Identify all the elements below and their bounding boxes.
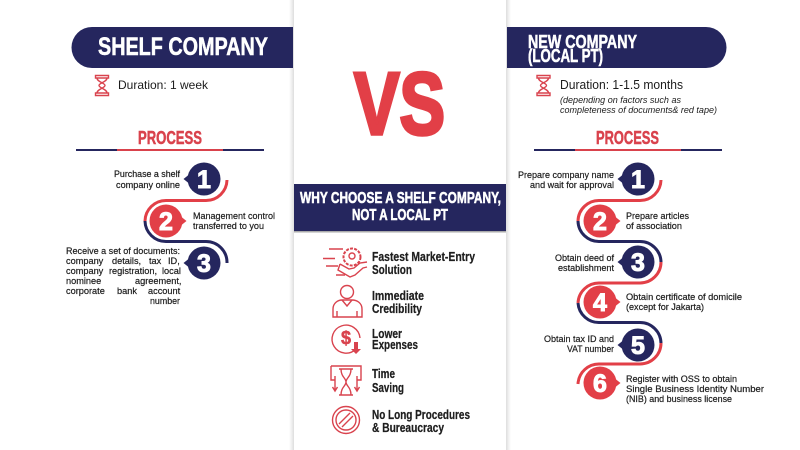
step 1: 1 (197, 166, 211, 194)
step 1 (518, 162, 654, 196)
step 3: establishment (558, 263, 614, 273)
duration: shelf company: Duration: 1 week (118, 78, 209, 92)
step 6: (NIB) and business license (626, 394, 732, 404)
process flow: shelf company (66, 162, 275, 306)
heading banner: new company: NEW COMPANY (528, 32, 637, 52)
duration: new company: Duration: 1-1.5 months (560, 78, 683, 92)
step 4: (except for Jakarta) (626, 302, 704, 312)
step 2: Prepare articles (626, 211, 689, 221)
benefit: lower expenses: Lower (372, 327, 402, 341)
step 3: 3 (197, 250, 211, 278)
heading banner: shelf company: SHELF COMPANY (98, 33, 268, 61)
step 1 (114, 162, 220, 196)
benefit: immediate credibility: Immediate (372, 289, 424, 303)
step 3: ID, (168, 256, 180, 266)
step 5: VAT number (567, 344, 614, 354)
panel: centre column (289, 0, 511, 450)
step 4 (584, 286, 742, 318)
step 1: and wait for approval (530, 180, 614, 190)
benefit: no long procedures (332, 406, 470, 435)
icon: dollar with down arrow: $ (341, 328, 351, 348)
why choose banner: NOT A LOCAL PT (352, 207, 448, 224)
heading banner: shelf company (72, 27, 293, 68)
benefit: time saving: Saving (372, 381, 404, 395)
step 2: transferred to you (193, 221, 264, 231)
benefit: fastest market-entry: Fastest Market-Entry (372, 250, 475, 264)
heading banner: new company (507, 27, 726, 68)
step 6: Single Business Identity Number (626, 384, 764, 394)
duration: new company: (depending on factors such as (560, 95, 682, 105)
step 5: Obtain tax ID and (544, 334, 614, 344)
step 3: nominee (66, 276, 101, 286)
step 3: number (150, 296, 180, 306)
duration: new company: completeness of documents& red tape) (560, 105, 717, 115)
step 3: bank (117, 286, 137, 296)
step 3 (555, 246, 654, 278)
step 2: of association (626, 221, 682, 231)
step 3: registration, (109, 266, 157, 276)
benefit: immediate credibility (333, 286, 424, 317)
step 3: local (162, 266, 181, 276)
step 1: Purchase a shelf (114, 169, 180, 179)
icon: person with badge (333, 286, 362, 317)
step 3: details, (112, 256, 141, 266)
step 1: company online (116, 180, 180, 190)
benefit: fastest market-entry: Solution (372, 263, 412, 277)
step 3: agreement, (135, 276, 181, 286)
step 3: 3 (631, 249, 645, 277)
step 1: Prepare company name (518, 170, 614, 180)
step 4: 4 (593, 289, 607, 317)
step 2: 2 (593, 208, 607, 236)
why choose banner (294, 184, 506, 232)
step 1: 1 (631, 166, 645, 194)
benefit: lower expenses: Expenses (372, 338, 418, 352)
duration: shelf company (96, 76, 209, 96)
process flow: new company (518, 162, 764, 404)
icon: prohibition sign (332, 406, 360, 434)
step 6: 6 (593, 370, 607, 398)
step 6: Register with OSS to obtain (626, 374, 737, 384)
step 3: company (66, 266, 104, 276)
heading banner: new company: (LOCAL PT) (528, 46, 603, 66)
step 3: tax (149, 256, 162, 266)
benefit: immediate credibility: Credibility (372, 302, 422, 316)
step 3: Receive a set of documents: (66, 246, 180, 256)
icon: gear and handshake (323, 248, 367, 277)
icon: hourglass right (537, 76, 550, 96)
duration: new company (537, 76, 717, 115)
step 2 (584, 204, 689, 238)
icon: hourglass left (96, 76, 108, 96)
step 3 (66, 246, 220, 306)
step 3: corporate (66, 286, 105, 296)
benefit: time saving (331, 366, 404, 395)
benefit: lower expenses (332, 325, 418, 354)
step 4: Obtain certificate of domicile (626, 292, 742, 302)
benefit: time saving: Time (372, 367, 395, 381)
why choose banner: WHY CHOOSE A SHELF COMPANY, (300, 190, 501, 207)
step 3: Obtain deed of (555, 253, 614, 263)
step 2 (150, 204, 275, 238)
benefit: fastest market-entry (323, 248, 475, 277)
icon: banknote and hourglass (331, 366, 361, 395)
process heading left: PROCESS (138, 128, 202, 148)
process heading right: PROCESS (596, 128, 659, 148)
step 5: 5 (631, 332, 645, 360)
step 2: 2 (159, 208, 173, 236)
benefit: no long procedures: & Bureaucracy (372, 421, 444, 435)
VS title: VS (354, 54, 445, 153)
step 3: company (66, 256, 104, 266)
benefit: no long procedures: No Long Procedures (372, 408, 470, 422)
step 6 (584, 366, 764, 404)
step 2: Management control (193, 211, 275, 221)
step 5 (544, 328, 654, 362)
step 3: account (148, 286, 181, 296)
